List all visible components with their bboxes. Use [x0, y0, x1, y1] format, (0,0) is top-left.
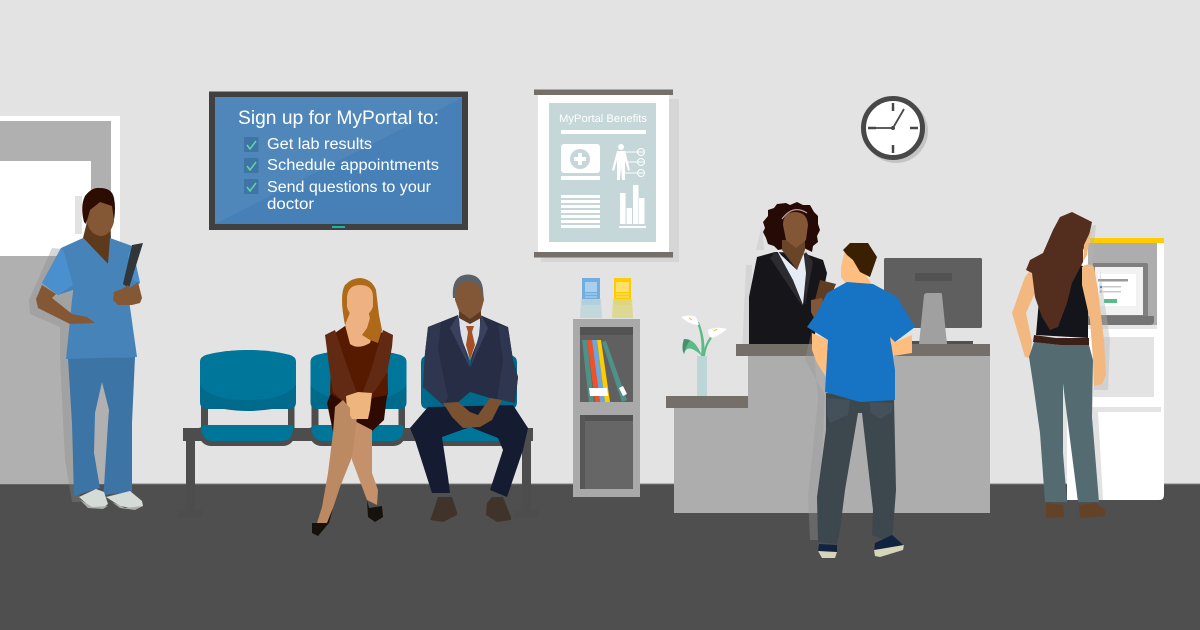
woman legs	[317, 400, 378, 523]
item: appointments: Schedule appointments	[267, 157, 439, 174]
sneakers	[818, 535, 904, 558]
blue shirt man shadow	[805, 330, 825, 540]
receptionist jacket	[749, 252, 827, 344]
wall clock	[864, 98, 928, 163]
receptionist hair	[763, 202, 820, 252]
man legs	[410, 405, 528, 497]
blue brochure	[580, 278, 602, 318]
books	[582, 340, 627, 402]
man shoes	[430, 497, 511, 522]
shelf	[573, 278, 640, 497]
man tie	[466, 326, 475, 360]
woman belt	[1033, 335, 1089, 345]
nurse pants	[68, 357, 135, 496]
neck	[841, 250, 872, 285]
man hair	[843, 243, 877, 277]
woman hands	[346, 392, 372, 419]
item: questions: Send questions to your	[267, 179, 431, 196]
item: lab results: Get lab results	[267, 136, 372, 153]
nurse shoes	[79, 489, 143, 510]
woman tank top	[1036, 265, 1088, 338]
woman skirt	[327, 390, 388, 433]
woman chest	[345, 310, 373, 347]
chair 3	[420, 350, 517, 446]
man jacket	[423, 315, 518, 405]
man arms	[812, 333, 912, 377]
icon: medical case	[561, 144, 600, 180]
nurse head	[87, 200, 114, 236]
checklist	[244, 136, 439, 213]
woman hair	[1026, 212, 1092, 330]
receptionist shirt	[775, 247, 806, 305]
receptionist face	[783, 212, 808, 248]
clipboard	[123, 243, 143, 288]
jeans	[817, 393, 896, 544]
chair 2	[309, 350, 406, 446]
item: questions	[244, 179, 431, 213]
floor	[0, 483, 1200, 630]
receptionist neck	[782, 240, 805, 270]
woman at kiosk	[1012, 212, 1110, 518]
nurse hand	[113, 282, 142, 305]
nurse hair	[82, 188, 115, 224]
man in blue shirt	[805, 243, 915, 558]
headband	[782, 210, 807, 219]
nurse scrub top	[42, 238, 140, 359]
woman back hair	[342, 278, 382, 343]
nurse shadow	[29, 248, 80, 502]
woman face	[347, 285, 373, 318]
jeans pockets	[827, 398, 893, 423]
man neck	[459, 305, 481, 324]
receptionist shadow	[742, 225, 764, 355]
woman sleeves	[325, 330, 393, 403]
woman shoes	[312, 500, 383, 536]
yellow brochure	[612, 278, 633, 318]
item: questions: doctor	[267, 196, 314, 213]
seated woman	[312, 278, 393, 536]
woman dress	[330, 326, 388, 403]
door	[0, 116, 120, 484]
woman left arm	[1012, 267, 1035, 358]
kiosk screen	[1087, 263, 1154, 325]
nurse neck	[83, 222, 111, 264]
receptionist lapels	[770, 252, 813, 307]
receptionist	[742, 202, 836, 355]
reception desk	[666, 344, 990, 513]
monitor sign	[209, 92, 468, 230]
folder	[815, 280, 836, 303]
icon: text lines	[561, 195, 600, 228]
icon: body diagram	[612, 144, 644, 180]
computer monitor	[884, 258, 982, 345]
woman side hair	[362, 293, 382, 343]
kiosk	[1063, 238, 1164, 500]
woman knee	[335, 400, 350, 422]
poster title: MyPortal Benefits	[559, 113, 648, 125]
woman shadow	[1088, 225, 1110, 500]
man lapels	[450, 315, 488, 368]
sign heading: Sign up for MyPortal to:	[238, 108, 439, 129]
man sleeves	[423, 322, 518, 405]
t-shirt	[807, 282, 915, 402]
nurse	[29, 188, 143, 510]
bench with chairs	[178, 350, 539, 517]
seated man	[410, 274, 528, 522]
man hands	[443, 398, 502, 428]
woman face edge	[1083, 230, 1091, 262]
flower vase	[681, 316, 727, 396]
icon: bar chart	[619, 185, 646, 228]
chair 1	[199, 350, 296, 446]
man head	[455, 280, 484, 319]
woman jeans	[1029, 342, 1099, 502]
woman right arm	[1082, 264, 1106, 386]
nurse left arm	[36, 285, 95, 324]
man shirt	[459, 315, 480, 360]
receptionist hand	[811, 298, 825, 320]
poster	[534, 90, 679, 262]
woman sandals	[1046, 503, 1105, 518]
man hair	[453, 274, 483, 298]
